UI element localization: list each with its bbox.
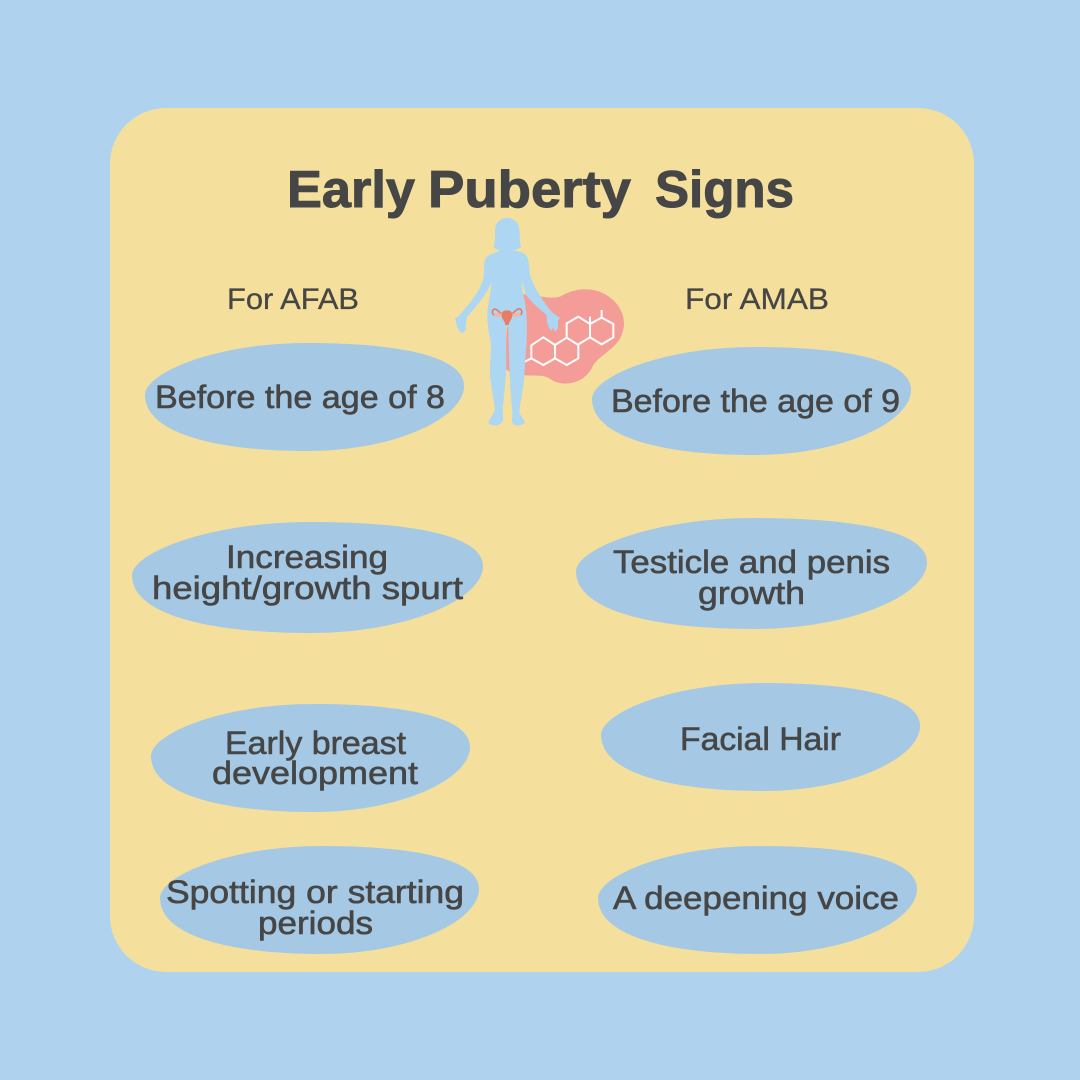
bubble: spotting or starting periods [160,846,479,954]
bubble: spotting or starting periods: periods [258,905,373,941]
bubble: early breast development: development [212,755,418,791]
bubble: before the age of 9: Before the age of 9 [611,383,900,419]
bubble: before the age of 9 [592,347,911,455]
icon: hormone molecule [525,310,613,365]
panel: main card [110,108,974,972]
illustration: body with hormone molecule [455,218,624,425]
icon: body silhouette [455,218,560,425]
bubble: increasing height: Increasing [226,539,388,575]
bubble: spotting or starting periods: Spotting or starting [166,874,464,910]
title: Early [287,161,415,219]
bubble: before the age of 8 [145,343,464,451]
title: Puberty [428,161,631,219]
heading: For AMAB: For AMAB [685,283,829,316]
bubble: increasing height: height/growth spurt [152,570,463,606]
bubble: early breast development [151,704,470,812]
heading: For AFAB: For AFAB [227,283,359,316]
icon: pink blob [505,289,624,384]
title: Signs [655,161,794,219]
bubble: facial hair: Facial Hair [680,721,841,757]
bubble: early breast development: Early breast [225,725,406,761]
bubble: facial hair [601,683,920,791]
bubble: testicle and penis growth: Testicle and penis [613,544,890,580]
bubble: before the age of 8: Before the age of 8 [155,379,445,415]
bubble: testicle and penis growth: growth [698,575,805,611]
bubble: testicle and penis growth [576,518,927,629]
bubble: a deepening voice: A deepening voice [613,880,899,916]
bubble: increasing height [132,522,483,633]
bubble: a deepening voice [598,846,917,954]
title [287,161,794,219]
icon: uterus [492,309,522,325]
